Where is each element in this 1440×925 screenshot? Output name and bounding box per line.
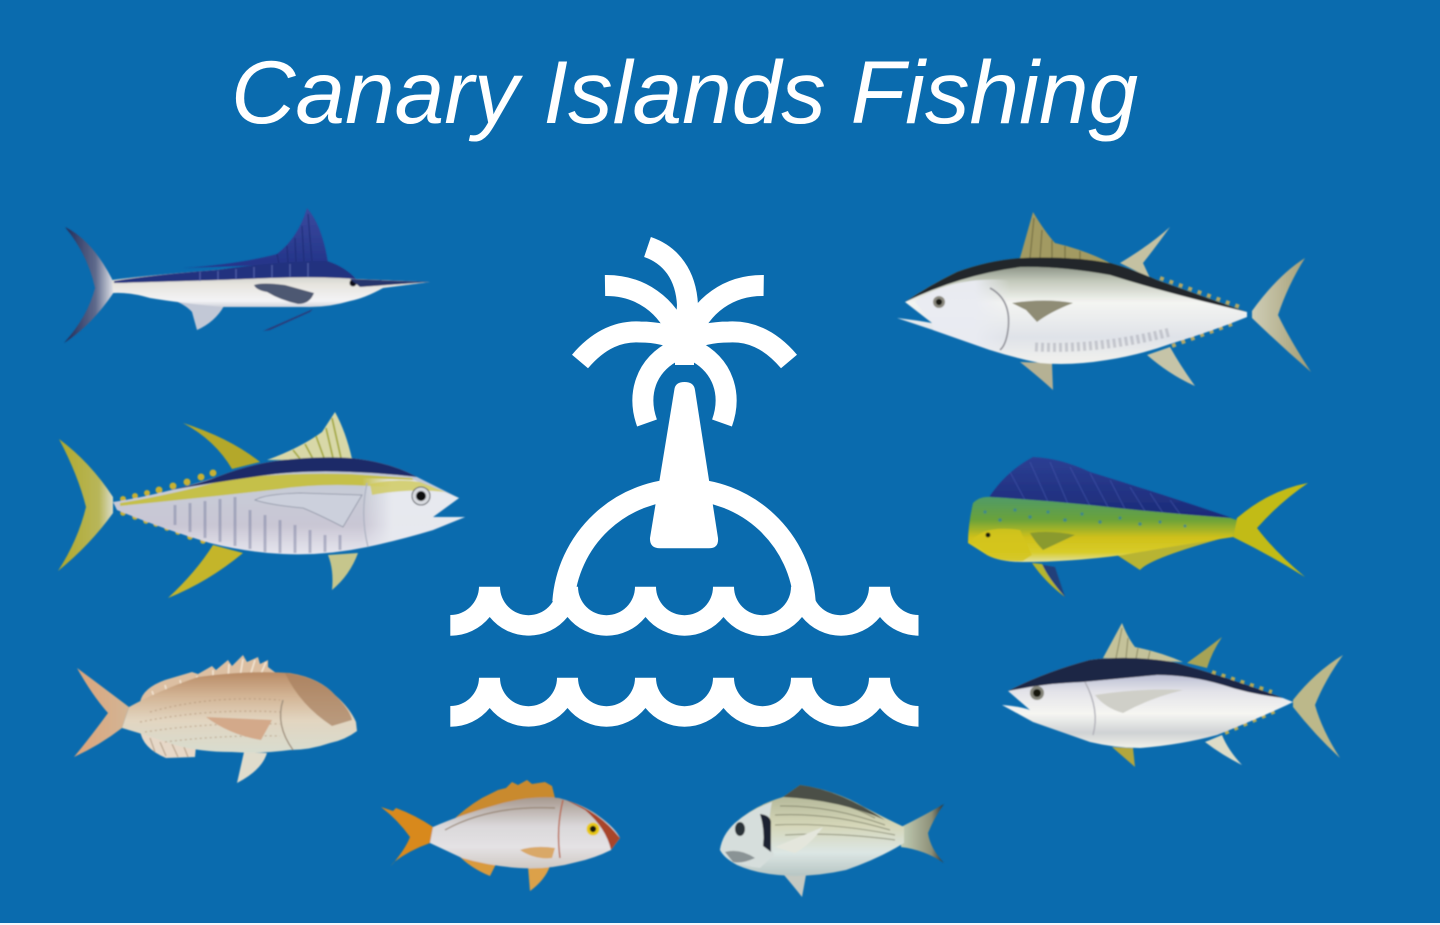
pandora lateral line <box>445 808 555 830</box>
icon: palm trunk <box>650 382 718 548</box>
bluefin second dorsal fin <box>1120 227 1170 278</box>
albacore body <box>1002 658 1293 748</box>
mahi ventral fin <box>1032 563 1065 597</box>
fish: mahi-mahi <box>968 457 1308 597</box>
yellowfin head <box>362 478 465 548</box>
albacore pectoral fin <box>1095 690 1183 713</box>
seabream pectoral fin <box>775 827 823 853</box>
yellowfin body stripes <box>175 497 340 553</box>
yellowfin pectoral fin <box>255 493 362 527</box>
pandora body <box>430 797 620 868</box>
mahi tail <box>1233 483 1308 577</box>
yellowfin dark back band <box>165 457 417 491</box>
seabream head <box>720 802 774 868</box>
yellowfin second dorsal fin <box>183 423 260 469</box>
pandora head blush <box>566 800 620 850</box>
bluefin finlets <box>1160 278 1240 346</box>
bluefin pectoral fin <box>1012 300 1073 322</box>
fish: pandora <box>381 780 620 891</box>
mahi pectoral fin <box>1030 532 1075 550</box>
bluefin belly markings <box>1035 332 1170 347</box>
icon: lower wave <box>450 678 918 727</box>
icon: upper wave <box>450 587 918 636</box>
snapper gill line <box>281 700 293 750</box>
yellowfin body <box>113 457 465 554</box>
fish: bluefin tuna <box>897 212 1311 390</box>
fish: albacore tuna <box>1002 623 1343 767</box>
snapper pectoral fin <box>206 717 272 740</box>
bluefin ventral fin <box>1020 362 1053 390</box>
fish: marlin <box>64 208 430 343</box>
bluefin body <box>897 258 1247 364</box>
albacore anal fin <box>1205 735 1242 765</box>
icon: palm tree island with waves <box>450 247 918 727</box>
seabream tail <box>901 804 944 863</box>
snapper body <box>122 672 357 753</box>
yellowfin first dorsal fin <box>267 412 352 460</box>
snapper head shading <box>285 673 352 726</box>
seabream body <box>720 785 904 876</box>
bluefin gill line <box>990 288 1009 350</box>
marlin ventral streamer <box>263 309 313 331</box>
snapper dorsal fin <box>140 655 276 702</box>
seabream head mark <box>760 814 771 852</box>
mahi eye <box>986 532 990 538</box>
yellowfin ventral fin <box>328 553 358 590</box>
mahi dorsal fin <box>988 457 1232 518</box>
fish: yellowfin tuna <box>58 412 465 598</box>
fish: gilthead seabream <box>720 785 944 897</box>
seabream eye <box>735 822 745 836</box>
bluefin tail <box>1252 258 1311 372</box>
pandora tail <box>381 807 433 867</box>
bluefin head <box>915 279 1010 352</box>
yellowfin finlets <box>120 470 216 544</box>
mahi head yellow patch <box>972 529 1032 561</box>
bluefin eye <box>933 296 945 308</box>
albacore finlets <box>1212 672 1278 733</box>
albacore eye <box>1030 686 1044 700</box>
marlin tail <box>64 227 114 343</box>
seabream dark dorsal edge <box>783 785 885 820</box>
pandora orange belly mark <box>520 847 555 858</box>
albacore second dorsal fin <box>1187 637 1222 668</box>
title: Canary Islands Fishing <box>231 42 1138 142</box>
albacore tail <box>1293 655 1343 758</box>
pandora dorsal fin <box>450 780 555 823</box>
albacore dark back band <box>1008 658 1283 698</box>
yellowfin eye <box>412 487 430 505</box>
pandora anal fin <box>456 853 497 876</box>
icon: island mound <box>563 490 805 602</box>
snapper anal fin <box>140 730 196 758</box>
marlin bill <box>350 279 430 287</box>
yellowfin anal fin <box>168 545 243 598</box>
albacore gill line <box>1085 682 1095 735</box>
albacore ventral fin <box>1112 747 1135 767</box>
seabream ventral fin <box>784 875 806 897</box>
marlin anal fin <box>173 300 224 330</box>
bluefin dark back band <box>905 258 1247 312</box>
marlin dark back band <box>114 261 356 283</box>
mahi body <box>968 497 1237 562</box>
seabream stripes <box>775 795 895 840</box>
snapper scale texture <box>140 699 280 742</box>
mahi anal fin <box>1117 537 1227 570</box>
albacore first dorsal fin <box>1103 623 1183 662</box>
mahi speckles <box>983 508 1186 528</box>
pandora ventral fin <box>528 866 550 891</box>
bluefin anal fin <box>1147 347 1195 386</box>
snapper tail <box>74 668 129 757</box>
marlin body <box>112 262 430 307</box>
yellowfin yellow lateral band <box>120 474 420 506</box>
marlin pectoral fin <box>254 284 314 304</box>
icon: palm fronds <box>580 247 789 423</box>
yellowfin tail <box>58 439 113 571</box>
bluefin first dorsal fin <box>1020 212 1110 263</box>
marlin eye <box>350 280 356 286</box>
pandora eye <box>586 822 600 836</box>
marlin dorsal fin <box>183 208 328 268</box>
snapper ventral fin <box>237 752 267 783</box>
fish: snapper <box>74 655 357 783</box>
